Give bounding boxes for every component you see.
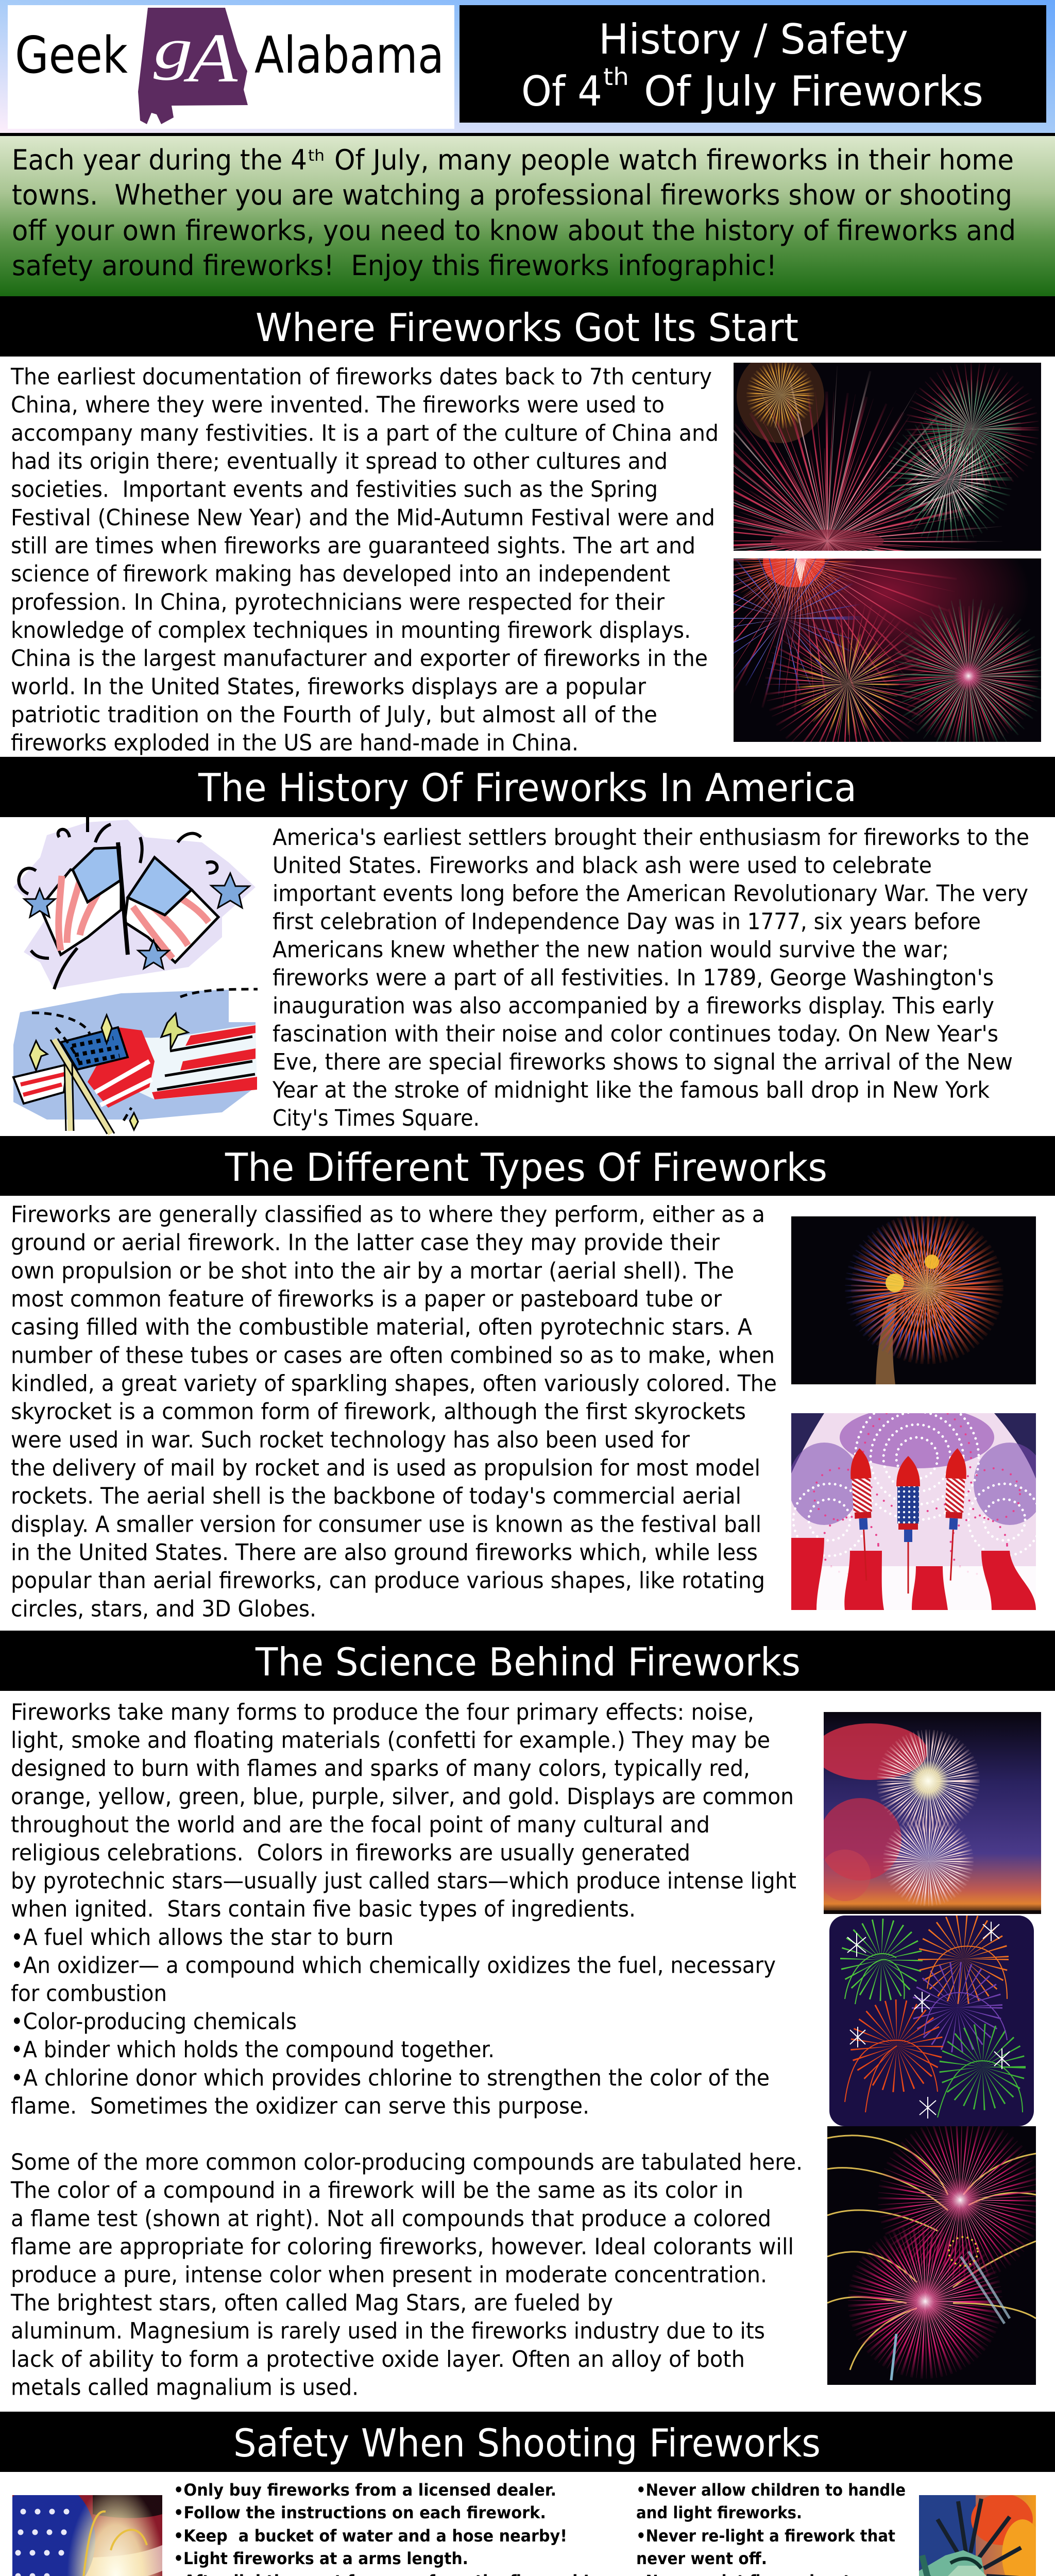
text block: types of fireworks: in the United States. There are also ground fireworks which, while less [11, 1540, 758, 1566]
safety tips: left column [174, 2480, 614, 2576]
safety tips: left column: •Only buy fireworks from a licensed dealer. [174, 2480, 556, 2500]
title panel: Of July Fireworks [644, 67, 983, 115]
text block: origins: had its origin there; eventually it spread to other cultures and [11, 449, 668, 474]
text block: history in America: Eve, there are special fireworks shows to signal the arrival of the New [273, 1049, 1013, 1075]
section heading: The History Of Fireworks In America [0, 757, 1055, 817]
text block: history in America: Year at the stroke of midnight like the famous ball drop in New York [272, 1078, 990, 1104]
text block: science of fireworks: flame are appropriate for coloring fireworks, however. Ideal colorants will [11, 2234, 794, 2260]
text block: types of fireworks: ground or aerial firework. In the latter case they may provide their [11, 1230, 720, 1256]
section heading: The Different Types Of Fireworks [0, 1136, 1055, 1196]
safety tips: right column: •Never re-light a firework that [636, 2526, 895, 2546]
text block: origins: societies. Important events and festivities such as the Spring [11, 477, 658, 503]
text block: types of fireworks: Fireworks are generally classified as to where they perform, either as a [11, 1202, 765, 1228]
text block: history in America: fireworks were a part of all festivities. In 1789, George Washington's [273, 965, 994, 991]
text block: types of fireworks: own propulsion or be shot into the air by a mortar (aerial shell). The [11, 1258, 734, 1284]
section heading: Safety When Shooting Fireworks: Safety When Shooting Fireworks [233, 2420, 821, 2466]
intro panel: off your own fireworks, you need to know about the history of fireworks and [12, 214, 1016, 247]
illustration: Statue of Liberty [919, 2494, 1043, 2576]
text block: types of fireworks: circles, stars, and 3D Globes. [11, 1596, 316, 1622]
text block: science of fireworks: •A chlorine donor which provides chlorine to strengthen the color of the [11, 2065, 770, 2091]
safety tips: left column: •Keep a bucket of water and a hose nearby! [174, 2526, 567, 2546]
text block: origins: accompany many festivities. It is a part of the culture of China and [11, 420, 719, 446]
text block: science of fireworks [10, 1700, 803, 2400]
text block: history in America: fascination with their noise and color continues today. On New Year's [273, 1021, 998, 1047]
photo: magenta and gold fireworks [827, 2126, 1036, 2385]
text block: origins [10, 364, 719, 756]
photo: American flag with firework [12, 2495, 162, 2576]
clipart: crossed flags [13, 817, 256, 989]
text block: science of fireworks: orange, yellow, green, blue, purple, silver, and gold. Displays are common [11, 1784, 794, 1810]
text block: science of fireworks: aluminum. Magnesium is rarely used in the fireworks industry due to its [11, 2318, 765, 2344]
text block: origins: science of firework making has developed into an independent [11, 562, 670, 587]
text block: types of fireworks: were used in war. Such rocket technology has also been used for [11, 1427, 690, 1453]
text block: science of fireworks: throughout the world and are the focal point of many cultural and [11, 1812, 710, 1838]
text block: science of fireworks: by pyrotechnic stars—usually just called stars—which produce intense light [11, 1869, 796, 1894]
text block: science of fireworks: •A binder which holds the compound together. [11, 2037, 495, 2063]
text block: science of fireworks: designed to burn with flames and sparks of many colors, typically red, [11, 1756, 750, 1782]
text block: science of fireworks: a flame test (shown at right). Not all compounds that produce a colored [11, 2206, 771, 2232]
section heading: The Science Behind Fireworks [0, 1631, 1055, 1691]
title panel: th [603, 63, 629, 91]
section heading: Safety When Shooting Fireworks [0, 2412, 1055, 2472]
safety tips: left column: •Light fireworks at a arms length. [174, 2549, 468, 2568]
intro panel: Each year during the 4 [12, 144, 307, 176]
text block: types of fireworks: popular than aerial fireworks, can produce various shapes, like rotating [11, 1568, 765, 1594]
logo: Geek Alabama: Geek [15, 26, 128, 85]
text block: science of fireworks: when ignited. Stars contain five basic types of ingredients. [11, 1896, 636, 1922]
text block: history in America [272, 825, 1029, 1131]
logo: Geek Alabama: Alabama [254, 26, 444, 85]
illustration: cartoon fireworks on navy [829, 1916, 1034, 2126]
text block: science of fireworks: The brightest stars, often called Mag Stars, are fueled by [10, 2291, 613, 2316]
text block: history in America: United States. Fireworks and black ash were used to celebrate [273, 853, 932, 879]
text block: origins: fireworks exploded in the US are hand-made in China. [11, 731, 578, 756]
text block: science of fireworks: Some of the more common color-producing compounds are tabulated here. [11, 2150, 803, 2176]
text block: science of fireworks: produce a pure, intense color when present in moderate concentration. [11, 2262, 767, 2288]
intro panel [0, 136, 1055, 296]
text block: science of fireworks: •A fuel which allows the star to burn [11, 1925, 394, 1951]
text block: origins: knowledge of complex techniques in mounting firework displays. [11, 618, 691, 643]
illustration: three rockets over stripes [791, 1413, 1036, 1610]
intro panel: Of July, many people watch fireworks in their home [334, 144, 1014, 176]
photo: orange firework with trail [791, 1216, 1036, 1384]
logo: Geek Alabama: A [183, 20, 238, 97]
text block: science of fireworks: The color of a compound in a firework will be the same as its color in [10, 2178, 743, 2204]
title panel [460, 5, 1046, 123]
text block: origins: patriotic tradition on the Fourth of July, but almost all of the [11, 702, 657, 728]
text block: types of fireworks: display. A smaller version for consumer use is known as the festival ball [11, 1512, 761, 1537]
header background [0, 0, 1055, 133]
safety tips: left column: •Follow the instructions on each firework. [174, 2503, 546, 2522]
title panel: Of 4 [521, 67, 602, 115]
text block: types of fireworks: kindled, a great variety of sparkling shapes, often variously colored. The [11, 1371, 777, 1397]
text block: science of fireworks: •An oxidizer— a compound which chemically oxidizes the fuel, necessary [11, 1953, 776, 1978]
text block: types of fireworks: most common feature of fireworks is a paper or pasteboard tube or [11, 1286, 722, 1312]
text block: science of fireworks: light, smoke and floating materials (confetti for example.) They may be [11, 1728, 770, 1754]
section heading: The Science Behind Fireworks: The Science Behind Fireworks [255, 1639, 801, 1685]
text block: science of fireworks: for combustion [11, 1981, 167, 2007]
logo: Geek Alabama [8, 5, 454, 129]
safety tips: right column: never went off. [636, 2549, 767, 2568]
text block: history in America: City's Times Square. [273, 1106, 480, 1131]
text block: science of fireworks: •Color-producing chemicals [11, 2009, 297, 2035]
text block: types of fireworks: number of these tubes or cases are often combined so as to make, when [11, 1343, 775, 1368]
safety tips: right column: and light fireworks. [636, 2503, 802, 2522]
section heading: Where Fireworks Got Its Start [0, 296, 1055, 357]
text block: types of fireworks: rockets. The aerial shell is the backbone of today's commercial aerial [11, 1484, 741, 1510]
safety tips: right column: •Never allow children to handle [636, 2480, 906, 2500]
section heading: The Different Types Of Fireworks: The Different Types Of Fireworks [225, 1145, 827, 1190]
text block: history in America: inauguration was also accompanied by a fireworks display. This early [273, 993, 994, 1019]
text block: history in America: America's earliest settlers brought their enthusiasm for fireworks to the [273, 825, 1029, 851]
text block: origins: China is the largest manufacturer and exporter of fireworks in the [11, 646, 708, 672]
text block: science of fireworks: flame. Sometimes the oxidizer can serve this purpose. [11, 2093, 589, 2119]
photo: red fireworks [734, 363, 1041, 551]
text block: history in America: Americans knew whether the new nation would survive the war; [273, 937, 949, 963]
text block: types of fireworks: skyrocket is a common form of firework, although the first skyrockets [11, 1399, 746, 1425]
text block: types of fireworks: the delivery of mail by rocket and is used as propulsion for most model [11, 1455, 760, 1481]
section heading: Where Fireworks Got Its Start: Where Fireworks Got Its Start [256, 305, 798, 350]
text block: origins: The earliest documentation of fireworks dates back to 7th century [10, 364, 712, 390]
text block: origins: profession. In China, pyrotechnicians were respected for their [11, 589, 665, 615]
text block: science of fireworks: lack of ability to form a protective oxide layer. Often an alloy of both [11, 2347, 745, 2372]
intro panel: th [308, 147, 325, 165]
text block: origins: world. In the United States, fireworks displays are a popular [11, 674, 646, 700]
text block: origins: Festival (Chinese New Year) and the Mid-Autumn Festival were and [11, 505, 715, 531]
text block: science of fireworks: metals called magnalium is used. [11, 2375, 359, 2400]
logo: Geek Alabama: g [154, 17, 193, 81]
divider bar [0, 133, 1055, 136]
text block: types of fireworks: casing filled with the combustible material, often pyrotechnic stars. A [11, 1315, 752, 1341]
text block: types of fireworks [11, 1202, 777, 1622]
text block: science of fireworks: Fireworks take many forms to produce the four primary effects: noise, [11, 1700, 754, 1725]
intro panel: safety around fireworks! Enjoy this fireworks infographic! [12, 249, 777, 282]
photo: dusk fireworks with smoke [814, 1712, 1041, 1914]
title panel: History / Safety [599, 15, 908, 63]
photo: multicolour fireworks [734, 558, 1041, 742]
section heading: The History Of Fireworks In America: The History Of Fireworks In America [198, 765, 857, 810]
text block: origins: still are times when fireworks are guaranteed sights. The art and [11, 533, 695, 559]
text block: origins: China, where they were invented. The fireworks were used to [11, 393, 665, 418]
safety tips: right column [636, 2480, 906, 2576]
text block: science of fireworks: religious celebrations. Colors in fireworks are usually generated [11, 1840, 690, 1866]
clipart: waving flag with stars [13, 989, 258, 1134]
intro panel: towns. Whether you are watching a professional fireworks show or shooting [12, 179, 1012, 211]
text block: history in America: first celebration of Independence Day was in 1777, six years before [273, 909, 981, 935]
